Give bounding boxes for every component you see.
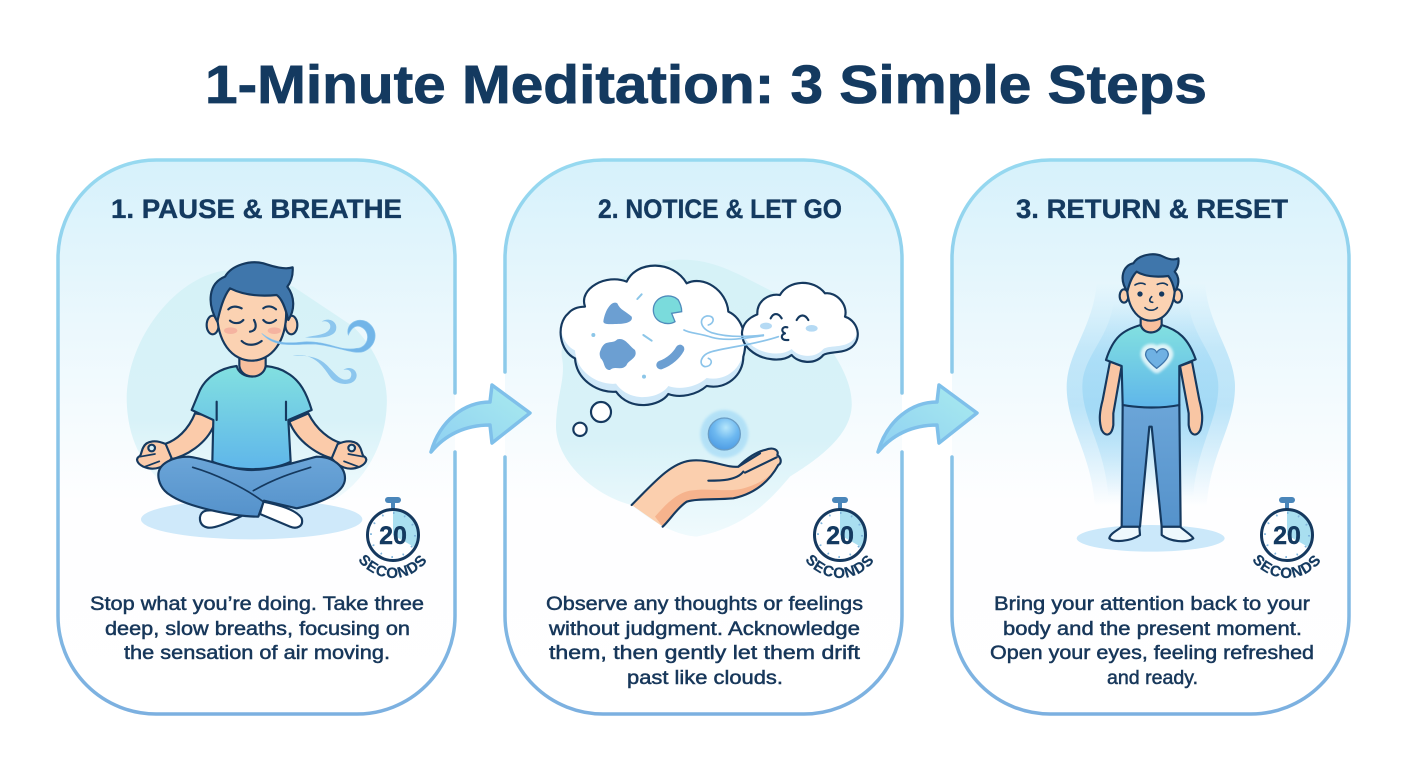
timer: step 2 <box>806 497 873 578</box>
icon: standing person with heart glow <box>1067 254 1235 552</box>
heading: step 3: 3. RETURN & RESET <box>1016 194 1289 224</box>
text: step 2 description: them, then gently let them drift <box>549 642 861 664</box>
icon: meditating person <box>127 262 387 539</box>
text: step 2 description <box>546 593 863 689</box>
timer: step 3: 20 <box>1273 522 1301 550</box>
text: step 1 description: deep, slow breaths, focusing on <box>105 618 410 640</box>
text: step 3 description: Open your eyes, feeling refreshed <box>990 642 1314 664</box>
timer: step 1 <box>359 497 426 578</box>
illustration: thought clouds and open hand <box>550 257 863 537</box>
text: step 1 description: Stop what you’re doing. Take three <box>90 593 424 615</box>
panel: step 3 return and reset <box>950 158 1351 716</box>
arrow: step 1 to step 2 <box>431 385 530 452</box>
text: step 3 description: body and the present moment. <box>1003 618 1302 640</box>
heading: step 2: 2. NOTICE & LET GO <box>598 194 842 224</box>
text: step 3 description <box>990 593 1314 689</box>
title: 1-Minute Meditation: 3 Simple Steps <box>205 55 1207 115</box>
text: step 3 description: Bring your attention back to your <box>994 593 1311 615</box>
timer: step 2: 20 <box>826 522 854 550</box>
text: step 1 description <box>90 593 424 664</box>
arrow: step 2 to step 3 <box>878 385 977 452</box>
timer: step 1: SECONDS <box>359 554 426 578</box>
heading: step 1: 1. PAUSE & BREATHE <box>111 194 402 224</box>
panel: step 1 pause and breathe <box>56 158 457 716</box>
panel: step 2 notice and let go <box>503 158 904 716</box>
timer: step 3 <box>1253 497 1320 578</box>
text: step 3 description: and ready. <box>1107 667 1198 689</box>
timer: step 2: SECONDS <box>806 554 873 578</box>
timer: step 3: SECONDS <box>1253 554 1320 578</box>
text: step 2 description: Observe any thoughts or feelings <box>546 593 863 615</box>
timer: step 1: 20 <box>379 522 407 550</box>
text: step 2 description: without judgment. Acknowledge <box>548 618 860 640</box>
text: step 1 description: the sensation of air moving. <box>124 642 390 664</box>
text: step 2 description: past like clouds. <box>627 667 783 689</box>
